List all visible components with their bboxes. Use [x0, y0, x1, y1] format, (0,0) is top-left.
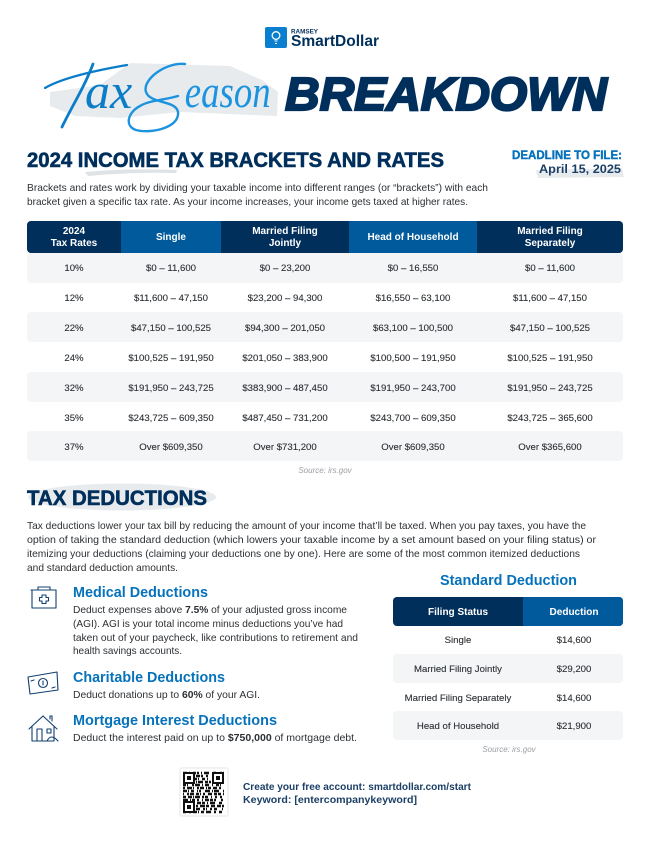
intro text: brackets: [27, 183, 488, 208]
charitable deductions: Charitable Deductions: [73, 670, 225, 686]
row: 32%: 32%: [64, 383, 84, 394]
row: 22%: $47,150 – 100,525: [131, 323, 211, 334]
row: 32%: $191,950 – 243,700: [370, 383, 456, 394]
medical deductions: health savings accounts.: [73, 646, 182, 657]
row: 22%: $63,100 – 100,500: [373, 323, 453, 334]
script words: ax: [85, 63, 132, 119]
row: 32%: $191,950 – 243,725: [507, 383, 593, 394]
row: married filing jointly: Married Filing Jointly: [414, 664, 502, 675]
row: 35%: 35%: [64, 413, 84, 424]
logo: Ramsey SmartDollar: RAMSEY: [291, 30, 318, 36]
row: 12%: 12%: [64, 293, 84, 304]
callout: filing deadline: [512, 150, 624, 178]
row: single: Single: [445, 635, 471, 646]
row: 10%: $0 – 11,600: [146, 263, 196, 274]
icon: dollar bill: [28, 672, 58, 694]
table header: [27, 221, 623, 253]
medical deductions: Deduct expenses above 7.5% of your adjusted gross income: [73, 605, 347, 616]
heading: tax deductions: TAX DEDUCTIONS: [27, 487, 207, 510]
table header: Married Filing: [517, 226, 583, 237]
source note: standard deduction: Source: irs.gov: [482, 745, 537, 754]
row: 10%: $0 – 16,550: [388, 263, 438, 274]
row: 24%: $100,525 – 191,950: [128, 353, 214, 364]
row: single: [445, 635, 591, 646]
heading: standard deduction: Standard Deduction: [440, 573, 577, 589]
row: 24%: $100,525 – 191,950: [507, 353, 593, 364]
intro text: brackets: bracket given a specific tax rate. As your income increases, your income gets taxed at higher rates.: [27, 197, 468, 208]
table: standard deduction: [393, 597, 623, 740]
table header: Head of Household: [367, 232, 459, 243]
brush background: [50, 63, 278, 118]
row: married filing separately: Married Filing Separately: [405, 693, 512, 704]
row: 10%: $0 – 23,200: [260, 263, 310, 274]
intro text: brackets: Brackets and rates work by dividing your taxable income into different ranges (or “brackets”) with each: [27, 183, 488, 194]
charitable deductions: Deduct donations up to 60% of your AGI.: [73, 690, 260, 701]
source note: brackets: Source: irs.gov: [298, 466, 353, 475]
row: married filing separately: [405, 693, 591, 704]
intro text: deductions: Tax deductions lower your tax bill by reducing the amount of your income that’ll be taxed. When you pay taxes, you have the: [27, 521, 586, 532]
intro text: deductions: and standard deduction amounts.: [27, 563, 178, 574]
row: 10%: [27, 253, 623, 283]
medical deductions: [73, 585, 358, 657]
script words: eason: [185, 67, 271, 118]
table header: 2024: [63, 226, 86, 237]
row: head of household: Head of Household: [417, 721, 499, 732]
table: income tax brackets: [27, 221, 623, 461]
mortgage interest deductions: Mortgage Interest Deductions: [73, 713, 277, 729]
row: 12%: $16,550 – 63,100: [376, 293, 450, 304]
table header: Separately: [525, 238, 576, 249]
row: 35%: $487,450 – 731,200: [242, 413, 328, 424]
call to action: Keyword: [entercompanykeyword]: [243, 795, 417, 806]
row: married filing jointly: $29,200: [557, 664, 591, 675]
mortgage interest deductions: Deduct the interest paid on up to $750,000 of mortgage debt.: [73, 733, 357, 744]
row: 22%: 22%: [64, 323, 84, 334]
row: 32%: [27, 372, 623, 402]
row: 22%: [27, 312, 623, 342]
charitable deductions: [73, 670, 260, 701]
row: 35%: $243,725 – 609,350: [128, 413, 214, 424]
row: 35%: [64, 413, 593, 424]
QR code: [180, 768, 228, 816]
row: 10%: 10%: [64, 263, 84, 274]
intro text: deductions: option of taking the standard deduction (which lowers your taxable income by a set amount based on your filing status) or: [27, 535, 597, 546]
table header: Married Filing: [252, 226, 318, 237]
row: 12%: $23,200 – 94,300: [248, 293, 322, 304]
row: 37%: Over $365,600: [518, 442, 582, 453]
row: 12%: [64, 293, 587, 304]
row: 32%: $383,900 – 487,450: [242, 383, 328, 394]
callout: filing deadline: DEADLINE TO FILE:: [512, 150, 622, 162]
intro text: deductions: itemizing your deductions (claiming your deductions one by one). Here are some of the most common itemized deductions: [27, 549, 580, 560]
call to action: Create your free account: smartdollar.com/start: [243, 782, 472, 793]
medical deductions: taken out of your paycheck, like contributions to retirement and: [73, 633, 358, 644]
row: 37%: Over $609,350: [381, 442, 445, 453]
row: 24%: [64, 353, 593, 364]
row: 22%: $47,150 – 100,525: [510, 323, 590, 334]
row: 22%: $94,300 – 201,050: [245, 323, 325, 334]
medical deductions: (AGI). AGI is your total income minus deductions you’ve had: [73, 619, 343, 630]
table header: Jointly: [269, 238, 302, 249]
row: 37%: Over $609,350: [139, 442, 203, 453]
row: 24%: $201,050 – 383,900: [242, 353, 328, 364]
call to action: [243, 782, 472, 806]
row: head of household: $21,900: [557, 721, 591, 732]
heading: income tax brackets: 2024 INCOME TAX BRACKETS AND RATES: [27, 149, 444, 172]
logo: Ramsey SmartDollar: SmartDollar: [291, 33, 379, 50]
intro text: deductions: [27, 521, 597, 574]
row: married filing separately: $14,600: [557, 693, 591, 704]
row: 12%: $11,600 – 47,150: [134, 293, 208, 304]
callout: filing deadline: April 15, 2025: [539, 162, 621, 176]
table header: Tax Rates: [51, 238, 98, 249]
BREAKDOWN wordmark: BREAKDOWN: [285, 68, 608, 120]
title: Tax Season BREAKDOWN: [45, 63, 608, 131]
icon: medical kit: [31, 587, 56, 608]
mortgage interest deductions: [73, 713, 357, 744]
table header: Deduction: [550, 607, 598, 618]
row: 37%: Over $731,200: [253, 442, 317, 453]
script words: [45, 63, 271, 131]
row: head of household: [393, 711, 623, 740]
row: 37%: [27, 431, 623, 461]
table header: Single: [156, 232, 186, 243]
row: 35%: $243,700 – 609,350: [370, 413, 456, 424]
row: 37%: 37%: [64, 442, 84, 453]
icon: house: [29, 716, 58, 741]
row: single: $14,600: [557, 635, 591, 646]
medical deductions: Medical Deductions: [73, 585, 208, 601]
row: 32%: $191,950 – 243,725: [128, 383, 214, 394]
row: 24%: $100,500 – 191,950: [370, 353, 456, 364]
logo: Ramsey SmartDollar: [265, 27, 379, 50]
row: 10%: $0 – 11,600: [525, 263, 575, 274]
table header: Filing Status: [428, 607, 488, 618]
row: 24%: 24%: [64, 353, 84, 364]
row: married filing jointly: [393, 654, 623, 683]
table header: [393, 597, 623, 626]
row: 12%: $11,600 – 47,150: [513, 293, 587, 304]
row: 35%: $243,725 – 365,600: [507, 413, 593, 424]
